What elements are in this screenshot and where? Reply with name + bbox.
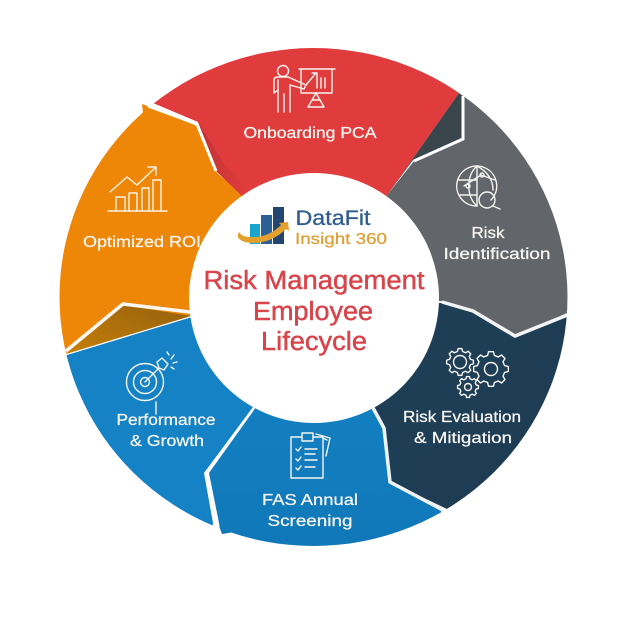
title: Lifecycle [261,328,367,356]
logo bars [250,207,284,244]
label: Performance & Growth: Performance [116,412,216,429]
label: Performance & Growth [116,412,216,450]
segment: Optimized ROI [60,104,242,354]
label: FAS Annual Screening: FAS Annual [262,492,358,509]
label: FAS Annual Screening: Screening [268,513,352,530]
title: Employee [253,298,373,326]
logo wordmark: DataFit [296,207,371,230]
segment: Performance and Growth [66,318,253,526]
label: Performance & Growth: & Growth [130,433,204,450]
label: Risk Identification [444,225,550,263]
center circle [189,173,439,423]
segment: FAS Annual Screening [209,407,444,546]
icon: presenter at board [274,66,335,112]
icon: globe with magnifier [457,166,500,209]
segment: Risk Evaluation and Mitigation [374,300,567,509]
lifecycle infographic [60,48,568,546]
label: Risk Evaluation & Mitigation: & Mitigation [414,430,512,447]
label: Optimized ROI: Optimized ROI [83,234,201,251]
logo: DataFit Insight 360 [238,207,387,248]
label: Risk Evaluation & Mitigation: Risk Evaluation [403,409,521,426]
label: Risk Identification: Identification [444,246,550,263]
label: Risk Identification: Risk [472,225,505,242]
icon: target with arrow [126,352,177,414]
logo swoosh [238,222,289,243]
icon: growth chart [108,167,167,211]
title [204,267,424,356]
icon: gears [447,349,508,397]
label: FAS Annual Screening [262,492,358,530]
segment: Onboarding PCA [148,48,459,196]
label: Onboarding PCA: Onboarding PCA [244,125,377,142]
icon: clipboard checklist [291,433,330,478]
label: Risk Evaluation & Mitigation [403,409,521,447]
segment: Risk Identification [386,93,568,334]
title: Risk Management [204,267,424,295]
logo tagline: Insight 360 [295,231,387,248]
